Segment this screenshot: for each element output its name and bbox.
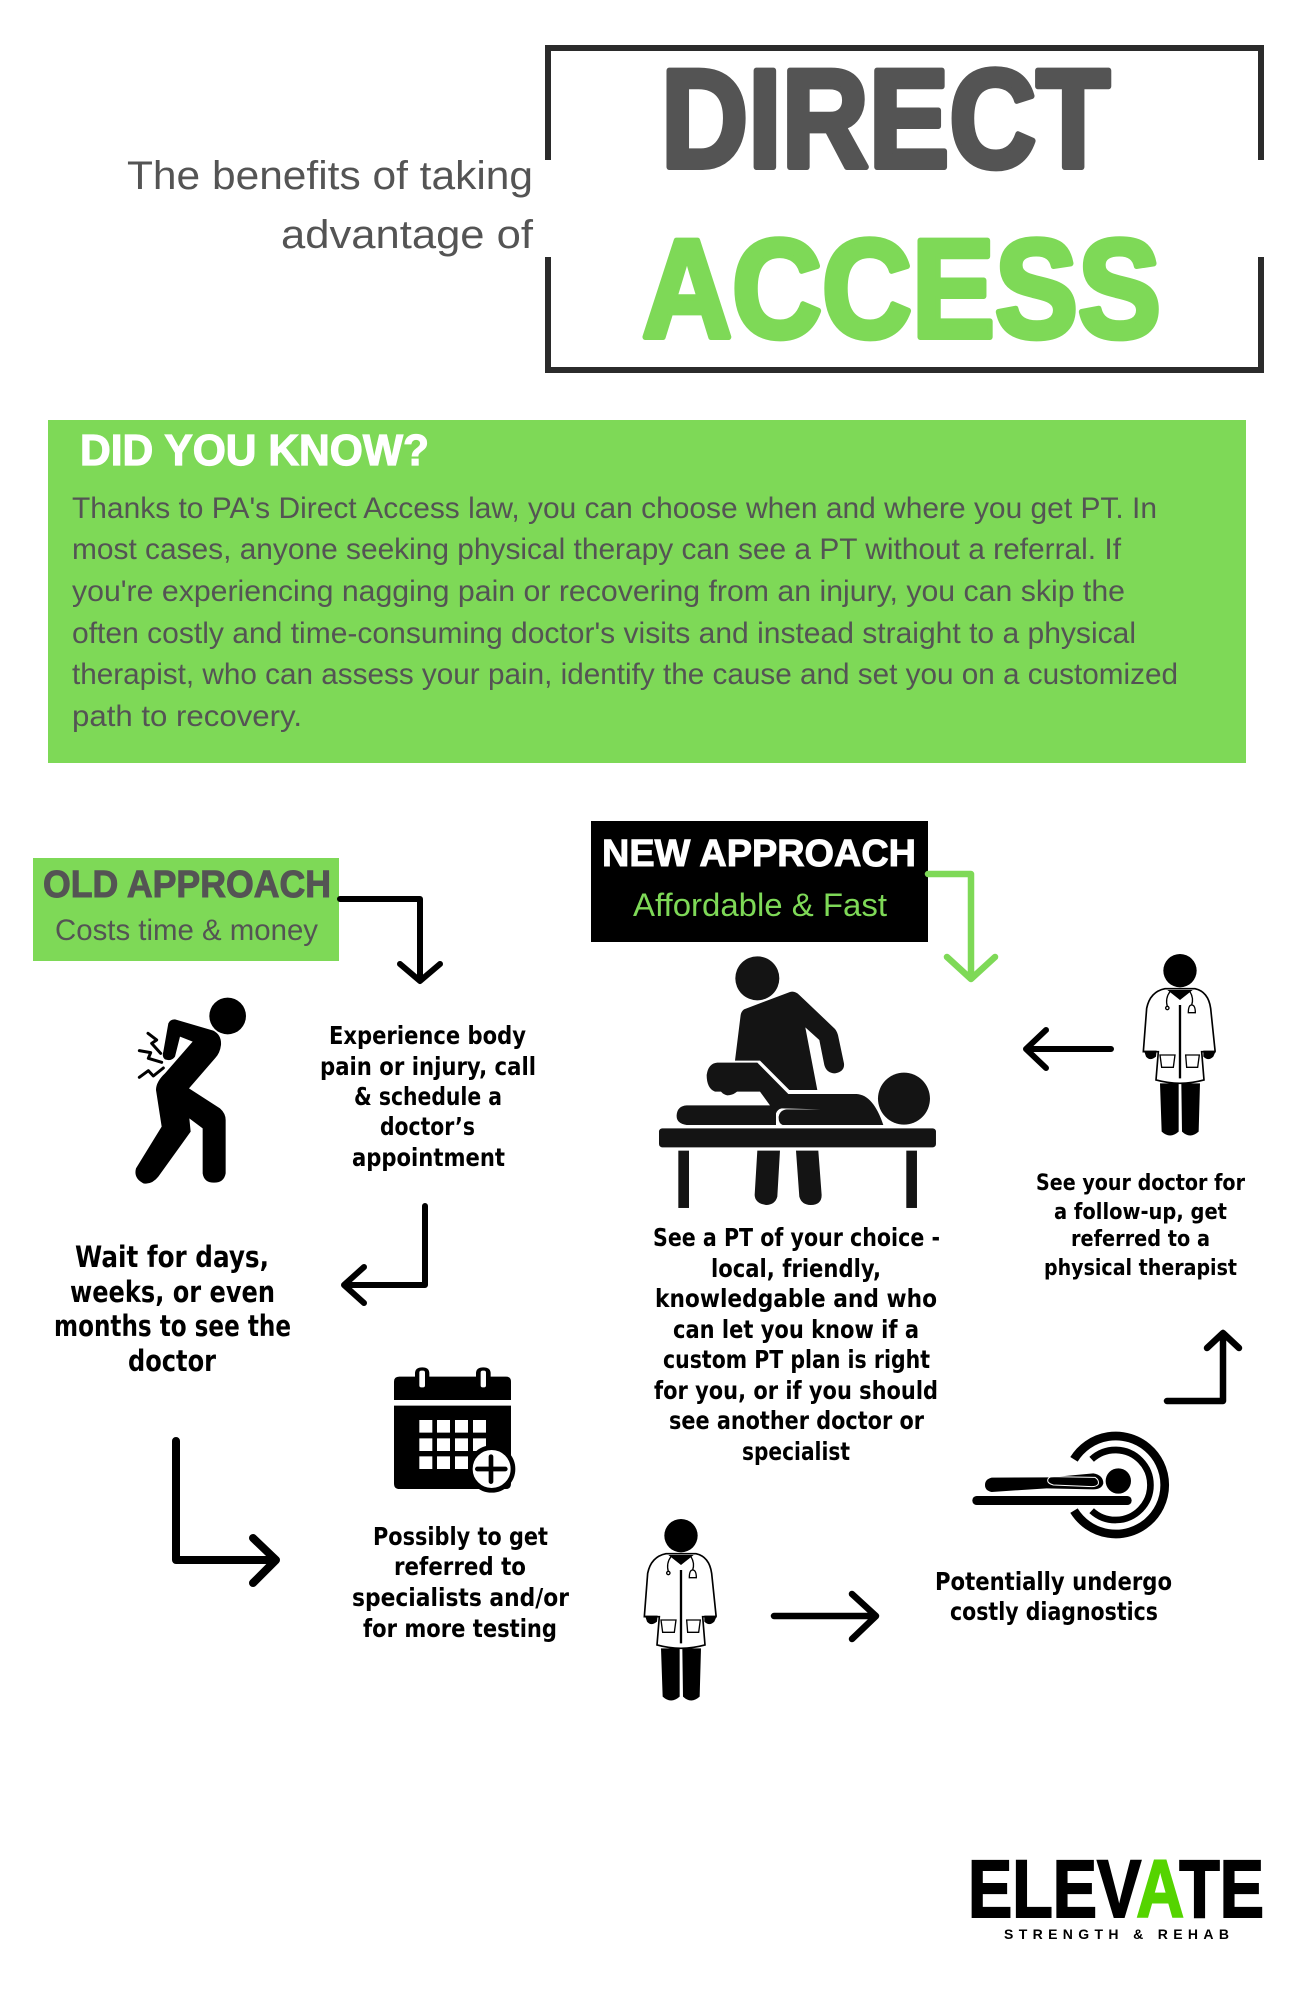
text: step specialists: specialists and/or [352, 1583, 570, 1612]
body text: path to recovery. [72, 700, 302, 733]
text: step specialists: Possibly to get [373, 1522, 548, 1551]
text: step see a pt: can let you know if a [673, 1315, 919, 1344]
text: step see a pt: custom PT plan is right [663, 1345, 930, 1374]
text: step specialists: for more testing [363, 1614, 557, 1643]
arrow: new approach to pt [928, 874, 995, 979]
text: step follow-up: See your doctor for [1036, 1171, 1245, 1196]
text: step see a pt: see another doctor or [669, 1406, 925, 1435]
text: step see a pt: specialist [742, 1437, 850, 1466]
text: step experience pain: pain or injury, call [320, 1052, 536, 1081]
body text: most cases, anyone seeking physical therapy can see a PT without a referral. If [72, 533, 1122, 566]
text: step wait: doctor [128, 1344, 217, 1378]
icon: physical therapist with patient [659, 956, 936, 1208]
title: direct access [642, 40, 1161, 367]
text: step see a pt: See a PT of your choice - [653, 1223, 940, 1252]
icon: calendar plus [394, 1367, 513, 1490]
text: step diagnostics: Potentially undergo [935, 1567, 1172, 1596]
text: step wait: weeks, or even [70, 1275, 275, 1309]
text: step see a pt: knowledgable and who [655, 1284, 937, 1313]
text: step experience pain [320, 1021, 536, 1172]
panel: did you know [48, 420, 1246, 763]
subtitle: advantage of [281, 213, 534, 257]
text: step follow-up: physical therapist [1044, 1256, 1237, 1281]
arrow: wait to testing [176, 1441, 276, 1583]
text: step specialists: referred to [394, 1552, 526, 1581]
text: step experience pain: doctor’s [380, 1112, 475, 1141]
logo: elevate strength and rehab: ELEVATE [968, 1844, 1264, 1935]
arrow: old approach to step 1 [340, 899, 440, 981]
text: step experience pain: appointment [352, 1143, 505, 1172]
subtitle [127, 154, 534, 257]
text: step follow-up: a follow-up, get [1054, 1200, 1227, 1225]
icon: doctor bottom [644, 1519, 717, 1700]
text: step follow-up [1036, 1171, 1245, 1281]
body text [72, 492, 1178, 733]
text: step see a pt: local, friendly, [711, 1254, 881, 1283]
text: step see a pt [653, 1223, 940, 1466]
text: step experience pain: & schedule a [354, 1082, 502, 1111]
label: old approach [33, 858, 339, 961]
arrow: step 1 to wait [344, 1206, 425, 1303]
body text: often costly and time-consuming doctor's visits and instead straight to a physical [72, 617, 1136, 650]
body text: Thanks to PA's Direct Access law, you can choose when and where you get PT. In [72, 492, 1157, 525]
body text: you're experiencing nagging pain or recovering from an injury, you can skip the [72, 575, 1125, 608]
label: old approach: Costs time & money [55, 914, 318, 947]
text: step wait [54, 1240, 291, 1378]
text: step wait: months to see the [54, 1309, 291, 1343]
title: direct access: ACCESS [642, 210, 1161, 367]
text: step wait: Wait for days, [75, 1240, 269, 1274]
title: direct access: DIRECT [661, 40, 1110, 197]
body text: therapist, who can assess your pain, identify the cause and set you on a customized [72, 658, 1178, 691]
label: new approach [591, 821, 928, 942]
text: step diagnostics [935, 1567, 1172, 1626]
arrow: diagnostics to follow-up [1167, 1333, 1239, 1401]
text: step see a pt: for you, or if you should [654, 1376, 938, 1405]
label: new approach: NEW APPROACH [602, 833, 916, 875]
text: step diagnostics: costly diagnostics [950, 1597, 1158, 1626]
text: step experience pain: Experience body [329, 1021, 526, 1050]
icon: mri scanner [972, 1436, 1165, 1534]
arrow: doctor to diagnostics [774, 1594, 876, 1639]
text: step specialists [352, 1522, 570, 1643]
icon: doctor top [1143, 954, 1216, 1135]
subtitle: The benefits of taking [127, 154, 533, 198]
title frame [548, 48, 1261, 370]
text: step follow-up: referred to a [1071, 1227, 1210, 1252]
logo: elevate strength and rehab: STRENGTH & REHAB [1004, 1926, 1229, 1942]
label: new approach: Affordable & Fast [633, 887, 887, 923]
label: old approach: OLD APPROACH [43, 864, 331, 906]
icon: back pain person [135, 998, 246, 1184]
arrow: follow-up to pt [1026, 1030, 1111, 1068]
heading: did you know: DID YOU KNOW? [80, 426, 429, 475]
